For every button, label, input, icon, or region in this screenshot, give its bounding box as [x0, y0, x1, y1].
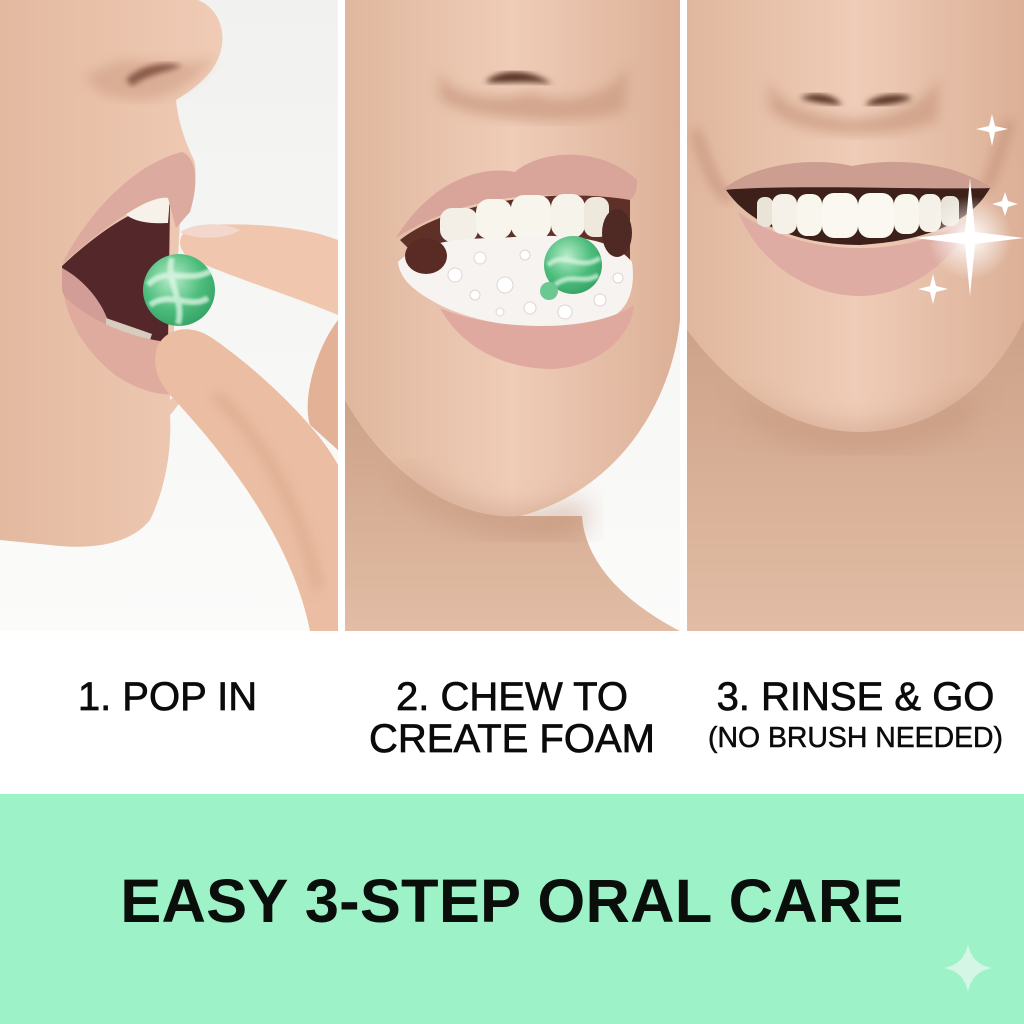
nostrils: [800, 94, 912, 105]
green gum in foam: [540, 236, 602, 300]
face profile: [0, 0, 222, 547]
lower lip: [440, 305, 634, 369]
mouth interior: [726, 182, 990, 245]
panel: step 3 rinse and go photo: [687, 0, 1024, 631]
chin shadow: [400, 465, 585, 535]
caption: step 2: CREATE FOAM: [369, 717, 655, 761]
dark hole left: [405, 242, 447, 274]
caption: step 2: [369, 675, 655, 761]
caption: step 2: 2. CHEW TO: [396, 675, 628, 719]
caption: step 3: [708, 675, 1003, 754]
mouth interior: [62, 204, 170, 345]
thumb shadow: [215, 395, 318, 590]
nostrils: [485, 72, 552, 84]
chin shadow: [766, 397, 966, 450]
step photos: [0, 0, 1024, 631]
banner: [0, 794, 1024, 1024]
nose shading: [85, 55, 215, 100]
caption: step 3: 3. RINSE & GO: [717, 675, 994, 719]
lower lip: [738, 212, 952, 296]
face: [345, 0, 680, 516]
neck: [345, 400, 680, 631]
upper teeth: [440, 194, 609, 242]
caption: step 1: 1. POP IN: [78, 675, 257, 719]
lower teeth: [106, 318, 152, 340]
lower lip: [64, 296, 170, 394]
nose shadow: [438, 65, 628, 120]
upper lip: [62, 152, 195, 264]
dark hole right: [602, 209, 632, 257]
fingernail: [180, 224, 240, 238]
teeth: [757, 193, 959, 238]
nostril: [126, 64, 182, 86]
title: EASY 3-STEP ORAL CARE: [120, 867, 904, 936]
lower neck: [687, 320, 1024, 631]
index finger: [180, 224, 338, 315]
upper lip: [722, 162, 992, 190]
upper teeth: [125, 197, 170, 223]
mouth interior: [400, 196, 630, 260]
tongue: [62, 268, 107, 324]
caption: step 3: (NO BRUSH NEEDED): [708, 722, 1003, 754]
thumb: [155, 329, 338, 631]
panel: step 2 chew to foam photo: [345, 0, 680, 631]
panel: step 1 pop in photo: [0, 0, 338, 631]
green gum ball: [143, 254, 215, 326]
smile creases: [695, 120, 1010, 200]
foam: [398, 236, 633, 328]
nose shadow: [768, 75, 940, 134]
upper lip: [396, 155, 637, 238]
sparkles: [915, 114, 1024, 304]
